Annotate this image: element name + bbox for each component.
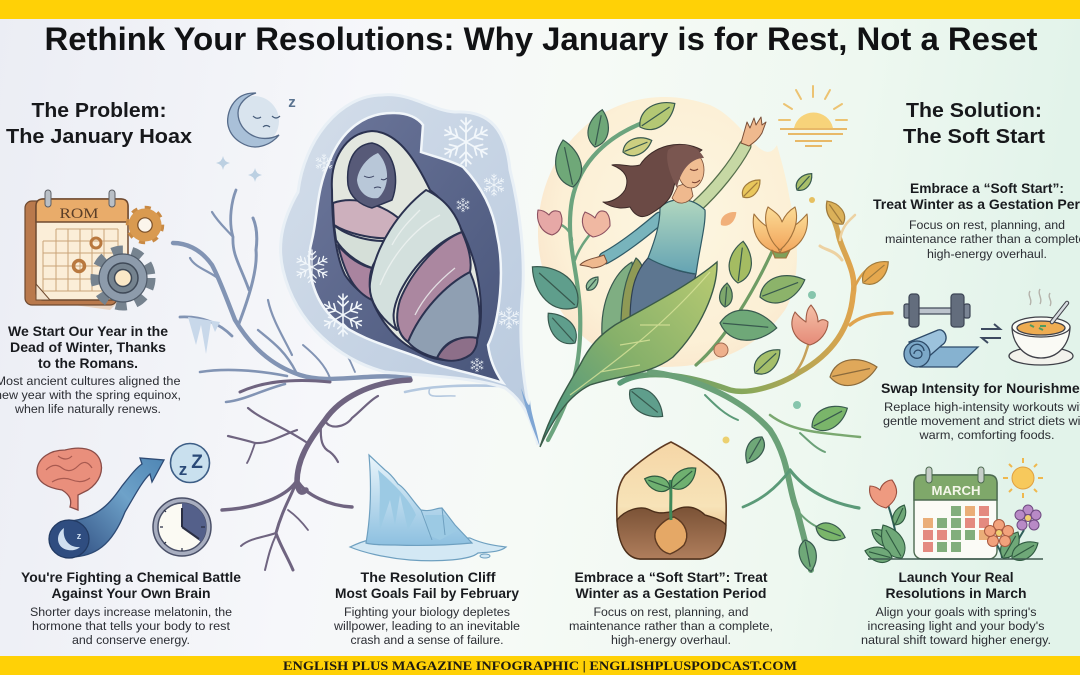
- flowing hair: [603, 144, 702, 217]
- text block: soft start gestation: [873, 180, 1080, 261]
- text block: soft start treat winter: Embrace a “Soft Start”: Treat: [574, 569, 768, 585]
- flower: peach tulip: [792, 305, 828, 345]
- panel: the solution column heading: The Solution:: [906, 99, 1042, 122]
- icon: dumbbell: [904, 294, 970, 327]
- text block: chemical battle: and conserve energy.: [72, 633, 190, 647]
- text block: start of the year: We Start Our Year in the: [8, 323, 168, 339]
- text block: soft start treat winter: maintenance rather than a complete,: [569, 619, 773, 633]
- snowflakes: [295, 118, 520, 372]
- bottom yellow band: [0, 656, 1080, 675]
- flower: large gold bloom: [753, 207, 807, 258]
- text block: soft start treat winter: [569, 569, 773, 647]
- decorative seeds: [722, 197, 816, 444]
- icon: Roman calendar with gears: [25, 190, 161, 310]
- icon: zz bubble: Z: [191, 452, 203, 473]
- icon: rolled mat: [904, 330, 978, 367]
- leaves: [522, 94, 894, 573]
- icon: Roman calendar with gears: ROM: [60, 206, 98, 222]
- illustration: dancing woman: [580, 117, 766, 345]
- sleeping face: [348, 143, 396, 208]
- text block: launch in March: Resolutions in March: [886, 585, 1026, 601]
- text block: resolution cliff: crash and a sense of failure.: [350, 633, 504, 647]
- text block: soft start treat winter: Focus on rest, planning, and: [594, 605, 749, 619]
- icon: swap arrows: [981, 324, 1001, 343]
- text block: soft start gestation: high-energy overhaul.: [927, 247, 1047, 261]
- text block: start of the year: when life naturally renews.: [14, 402, 161, 416]
- text block: start of the year: new year with the spring equinox,: [0, 388, 181, 402]
- footer credit: ENGLISH PLUS MAGAZINE INFOGRAPHIC | ENGLISHPLUSPODCAST.COM: [283, 658, 797, 673]
- icon: zz bubble: z: [179, 460, 187, 479]
- illustration: spring vines and leaves: [522, 94, 894, 573]
- calendar body: MARCH: [932, 483, 980, 498]
- right arm: [696, 146, 745, 207]
- torso: [648, 200, 705, 274]
- text block: resolution cliff: [333, 569, 520, 647]
- icon: moon end of arrow: z: [77, 531, 82, 541]
- tulip: [863, 480, 911, 565]
- blanket highlights: [380, 210, 455, 315]
- text block: chemical battle: Shorter days increase melatonin, the: [30, 605, 232, 619]
- flower: pink tulips: [538, 210, 610, 237]
- icon: blue arrow: [70, 458, 164, 557]
- panel: the problem column heading: The Problem:: [32, 99, 166, 122]
- sparkles: [216, 156, 262, 182]
- right flowers: [984, 505, 1042, 565]
- icon: sleeping crescent moon: [216, 93, 296, 182]
- text block: resolution cliff: The Resolution Cliff: [360, 569, 496, 585]
- text block: chemical battle: hormone that tells your body to rest: [32, 619, 231, 633]
- icon: zz bubble: [170, 444, 210, 482]
- icon: large gear: [95, 250, 151, 306]
- icon: clock: [153, 498, 211, 556]
- illustration: spring halo: [538, 97, 797, 367]
- legs: [630, 258, 696, 322]
- title: Rethink Your Resolutions: Why January is for Rest, Not a Reset: [44, 21, 1038, 57]
- text block: chemical battle: You're Fighting a Chemical Battle: [21, 569, 241, 585]
- text block: chemical battle: Against Your Own Brain: [52, 585, 210, 601]
- text block: resolution cliff: willpower, leading to an inevitable: [333, 619, 520, 633]
- text block: swap intensity: [881, 380, 1080, 442]
- illustration: winter branches and roots: [173, 190, 505, 570]
- winter wisp tail: [521, 388, 540, 447]
- moon snore letter: z: [288, 94, 296, 111]
- illustration: spring sun: [779, 86, 847, 146]
- icon: soup bowl: [1009, 289, 1073, 365]
- raised hand: [741, 117, 766, 146]
- text block: start of the year: Most ancient cultures aligned the: [0, 374, 181, 388]
- flower: bud: [714, 343, 728, 357]
- icon: dumbbell, yoga mat, arrows and soup bowl: [904, 289, 1073, 367]
- text block: launch in March: Launch Your Real: [898, 569, 1014, 585]
- text block: swap intensity: warm, comforting foods.: [918, 428, 1054, 442]
- icon: seed sprouting in soil: [617, 442, 726, 559]
- text block: soft start gestation: Embrace a “Soft Start”:: [910, 180, 1064, 196]
- illustration: woman wrapped in winter cocoon: [281, 95, 538, 445]
- icon: brain: [37, 448, 102, 510]
- top yellow band: [0, 0, 1080, 19]
- panel: the problem column heading: The January Hoax: [6, 125, 193, 148]
- icon: brain, melatonin arrow and clock: [37, 444, 211, 558]
- text block: launch in March: natural shift toward higher energy.: [861, 633, 1051, 647]
- text block: swap intensity: Replace high-intensity workouts with: [884, 400, 1080, 414]
- left arm: [605, 218, 660, 258]
- text block: soft start treat winter: high-energy overhaul.: [611, 633, 731, 647]
- calendar body: [914, 467, 997, 559]
- text block: launch in March: Align your goals with spring's: [876, 605, 1036, 619]
- text block: start of the year: Dead of Winter, Thanks: [10, 339, 166, 355]
- blanket cocoon: [332, 131, 481, 361]
- icon: small gear: [129, 209, 161, 241]
- panel: the problem column heading: [6, 99, 193, 148]
- text block: soft start treat winter: Winter as a Gestation Period: [576, 585, 766, 601]
- icon: moon end of arrow: [49, 520, 89, 558]
- text block: start of the year: to the Romans.: [38, 355, 138, 371]
- panel: the solution column heading: [903, 99, 1045, 148]
- icon: melting iceberg: [350, 455, 506, 561]
- hair cap: [667, 145, 704, 188]
- text block: resolution cliff: Most Goals Fail by February: [335, 585, 519, 601]
- icicles: [188, 317, 220, 354]
- sun: [1003, 458, 1043, 498]
- icon: March calendar with flowers and sun: [863, 458, 1043, 565]
- panel: the solution column heading: The Soft Start: [903, 125, 1045, 148]
- text block: chemical battle: [21, 569, 241, 647]
- text block: launch in March: [861, 569, 1051, 647]
- neck and face: [672, 182, 693, 203]
- text block: start of the year: [0, 323, 181, 416]
- text block: launch in March: increasing light and your body's: [868, 619, 1044, 633]
- text block: resolution cliff: Fighting your biology depletes: [344, 605, 510, 619]
- illustration: large foreground leaf: [521, 262, 717, 447]
- illustration: flowers on the vines: [538, 197, 828, 444]
- text block: soft start gestation: Focus on rest, planning, and: [909, 218, 1065, 232]
